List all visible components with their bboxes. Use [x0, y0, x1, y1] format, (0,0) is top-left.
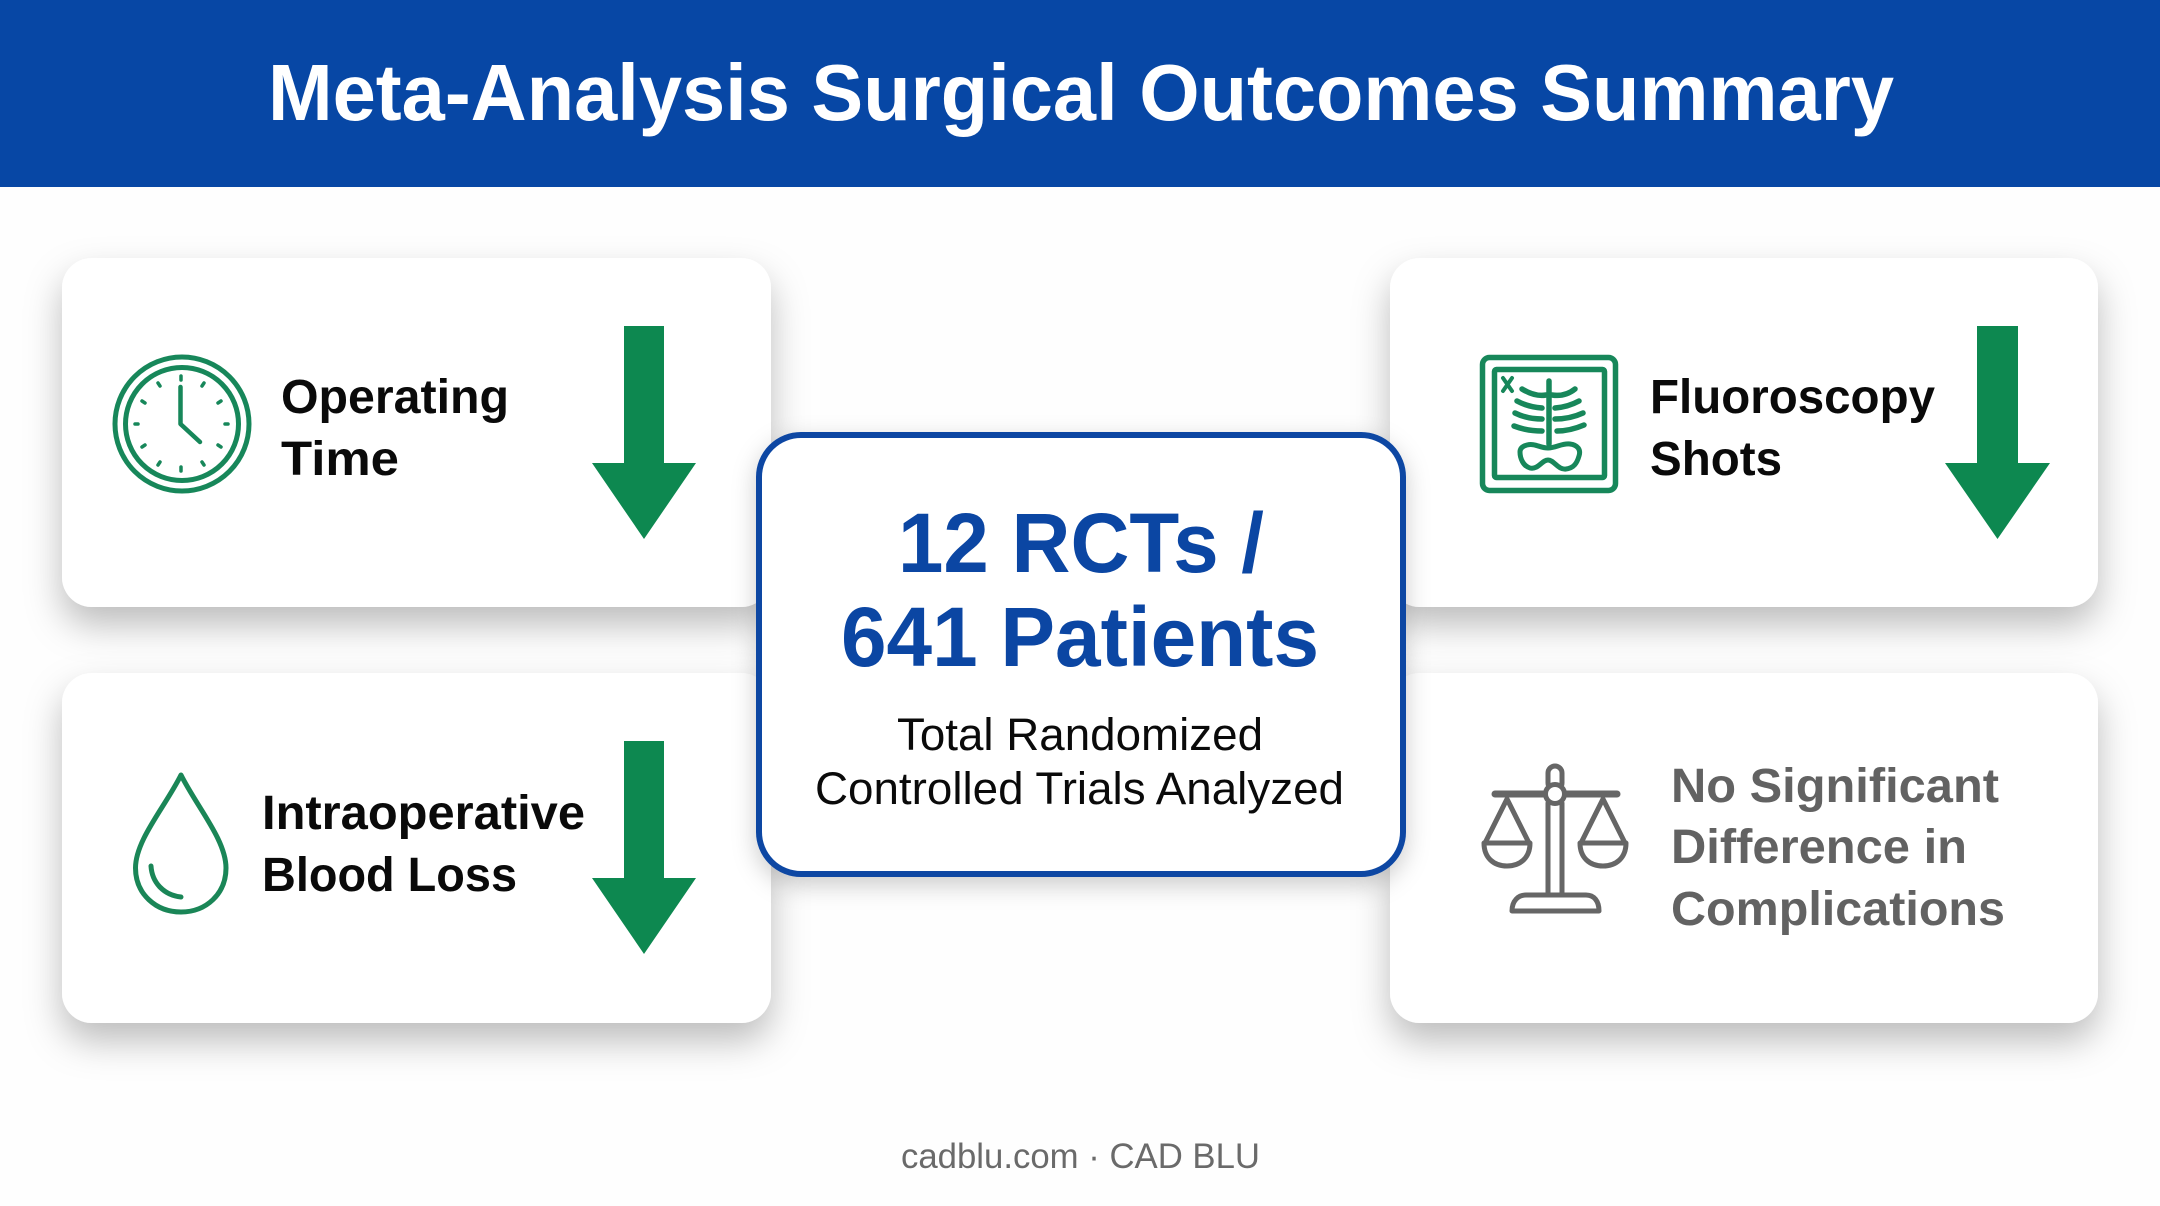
arrow: down	[592, 741, 696, 954]
label: operating time: Time	[281, 433, 399, 486]
icon: blood drop	[136, 775, 226, 912]
panel: operating time	[62, 258, 771, 607]
title: Meta-Analysis Surgical Outcomes Summary	[268, 48, 1894, 137]
label: intraoperative blood loss: Blood Loss	[262, 849, 517, 902]
description: total randomized controlled trials: Controlled Trials Analyzed	[815, 763, 1344, 814]
label: operating time: Operating	[281, 371, 509, 424]
label: no significant difference in complications: No Significant	[1671, 760, 1999, 813]
label: fluoroscopy shots: Shots	[1650, 433, 1782, 486]
panel: fluoroscopy shots	[1390, 258, 2098, 607]
stat: 12 RCTs / 641 Patients: 12 RCTs /	[898, 496, 1264, 590]
panel: central statistic	[759, 435, 1403, 874]
panel: no significant difference	[1390, 673, 2098, 1023]
icon: clock	[115, 357, 249, 491]
label: no significant difference in complications: Complications	[1671, 883, 2005, 936]
panel: intraoperative blood loss	[62, 673, 771, 1023]
arrow: down	[592, 326, 696, 539]
description: total randomized controlled trials: Total Randomized	[897, 709, 1263, 760]
header banner	[0, 0, 2160, 187]
label: fluoroscopy shots: Fluoroscopy	[1650, 371, 1935, 424]
icon: balance scale	[1484, 766, 1626, 911]
stat: 12 RCTs / 641 Patients: 641 Patients	[841, 590, 1319, 684]
label: no significant difference in complications: Difference in	[1671, 821, 1967, 874]
icon: x-ray	[1482, 358, 1616, 490]
label: intraoperative blood loss: Intraoperative	[262, 787, 585, 840]
arrow: down	[1945, 326, 2050, 539]
footer credit: cadblu.com · CAD BLU	[901, 1137, 1260, 1176]
